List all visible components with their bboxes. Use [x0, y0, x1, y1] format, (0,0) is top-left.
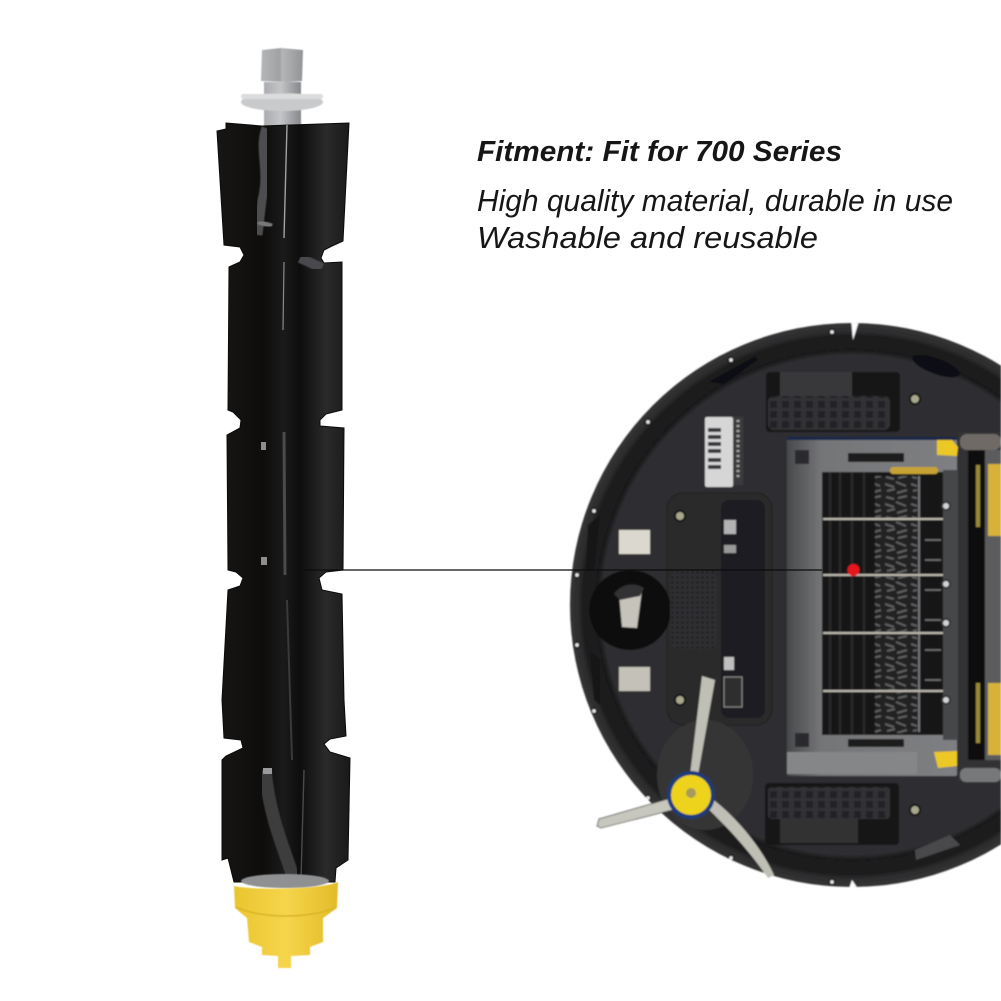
white contact pads	[619, 530, 650, 691]
bay cross wires	[823, 519, 943, 691]
pointer line from brush to robot	[303, 569, 822, 571]
rating label panel	[667, 493, 772, 725]
robot vacuum underside	[560, 318, 1001, 892]
bottom bumper notch	[848, 879, 858, 888]
brush centre fin highlights	[258, 125, 322, 880]
red marker dot	[848, 564, 860, 576]
barcode sticker	[705, 417, 743, 487]
bottom wheel	[765, 783, 899, 845]
feature line: washable: Washable and reusable	[477, 220, 818, 255]
text block: product features	[477, 136, 953, 255]
top side vents	[586, 350, 962, 860]
yellow latches	[934, 440, 958, 768]
brush arm: lower right	[699, 794, 774, 878]
brush black blades	[217, 123, 350, 882]
side brush well	[656, 720, 726, 830]
mesh panel	[668, 600, 672, 620]
roller brush illustration	[217, 48, 350, 968]
right side rail	[958, 432, 1001, 782]
brush bay frame	[787, 437, 958, 776]
brush grey hex cap and shaft	[241, 48, 323, 127]
side brush	[597, 676, 774, 878]
edge rivets	[574, 329, 835, 885]
top bumper notch	[851, 318, 860, 340]
brush yellow end cap	[234, 874, 338, 968]
brush arm: left	[597, 797, 680, 828]
brush bay interior with rollers	[822, 467, 943, 735]
robot body	[560, 318, 1001, 892]
heading: fitment: Fitment: Fit for 700 Series	[477, 136, 842, 168]
screws	[675, 394, 920, 815]
feature line: material: High quality material, durable in use	[477, 183, 953, 218]
brush hub	[667, 771, 715, 819]
top wheel	[766, 372, 900, 432]
caster wheel	[589, 570, 671, 650]
wire clips	[942, 502, 950, 704]
brush arm: upper	[690, 676, 715, 775]
